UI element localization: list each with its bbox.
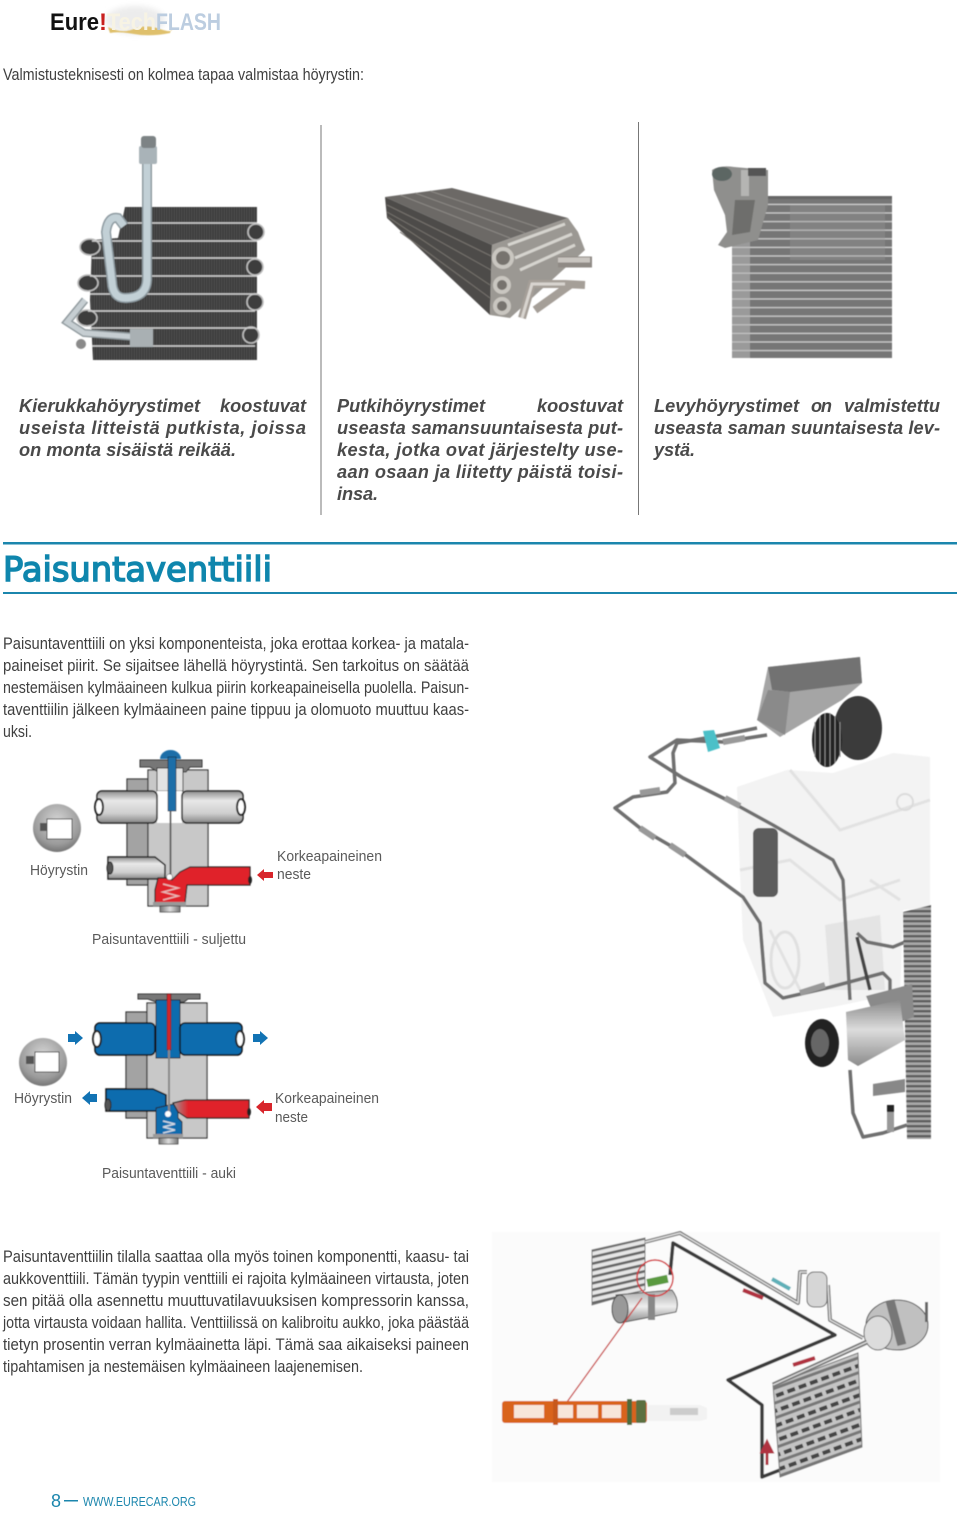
- label: Korkeapaineinen: [277, 849, 382, 865]
- paragraph: orifice tube: Paisuntaventtiilin tilalla saattaa olla myös toinen komponentti, kaasu- tai: [3, 1247, 469, 1266]
- label: Paisuntaventtiili - auki: [102, 1166, 236, 1182]
- paragraph: orifice tube: tietyn prosentin verran kylmäainetta läpi. Tämä saa aikaiseksi paineen: [3, 1335, 469, 1354]
- flow arrow: [772, 1279, 790, 1289]
- image: plate evaporator: [712, 166, 892, 358]
- cyan clip: [703, 730, 720, 752]
- gray low pressure pipe: [645, 1233, 863, 1338]
- logo: EureTech Flash: Tech: [107, 9, 156, 36]
- caption column 2: kesta, jotka ovat järjestelty use-: [337, 440, 623, 460]
- paragraph: orifice tube: aukkoventtiili. Tämän tyypin venttiili ei rajoita kylmäaineen virtausta, joten: [3, 1269, 469, 1288]
- caption column 3: valmistettu: [844, 396, 940, 416]
- label: Korkeapaineinen: [275, 1091, 379, 1107]
- diagram: valve open: [14, 994, 379, 1182]
- caption column 1: useista litteistä putkista, joissa: [19, 418, 306, 438]
- caption column 3: useasta saman suuntaisesta lev-: [654, 418, 940, 438]
- caption column 3: ystä.: [653, 440, 695, 460]
- paragraph: expansion valve: taventtiilin jälkeen kylmäaineen paine tippuu ja olomuoto muuttuu kaas-: [3, 700, 469, 719]
- icon: evaporator disc: [33, 804, 81, 852]
- blower cylinder: [612, 1290, 677, 1323]
- logo: EureTech Flash: !: [99, 9, 107, 36]
- engine ghost: [737, 753, 930, 1017]
- caption column 3: Levyhöyrystimet: [654, 396, 800, 416]
- red leader line: [567, 1298, 642, 1402]
- image: engine and AC circuit: [615, 657, 931, 1139]
- caption column 3: [653, 396, 940, 460]
- label: Höyrystin: [30, 863, 88, 879]
- label: neste: [277, 867, 311, 883]
- paragraph: expansion valve: paineiset piirit. Se sijaitsee lähellä höyrystintä. Sen tarkoitus on säätää: [3, 656, 469, 675]
- caption column 2: [337, 396, 624, 504]
- logo: EureTech Flash: [50, 6, 221, 36]
- receiver: [807, 1272, 827, 1307]
- label: Paisuntaventtiili - suljettu: [92, 932, 246, 948]
- icon: blue arrow left: [82, 1091, 97, 1105]
- diagram: valve closed: [30, 750, 382, 948]
- divider right: [638, 122, 640, 515]
- orifice tube: [502, 1399, 707, 1425]
- label: Höyrystin: [14, 1091, 72, 1107]
- dark liquid pipe: [670, 1243, 835, 1477]
- compressor: [805, 984, 914, 1132]
- icon: red arrow: [256, 1100, 272, 1114]
- website: WWW.EURECAR.ORG: [83, 1495, 196, 1509]
- caption column 2: insa.: [337, 484, 378, 504]
- image: coil evaporator: [67, 136, 264, 360]
- caption column 2: koostuvat: [537, 396, 624, 416]
- flow arrow: [743, 1290, 763, 1298]
- icon: blue arrow in: [68, 1031, 83, 1045]
- caption column 1: [19, 396, 307, 460]
- diagram: AC circuit with orifice tube: [492, 1232, 940, 1482]
- compressor: [864, 1299, 928, 1350]
- paragraph: orifice tube: sen pitää olla asennettu muuttuvatilavuuksisen kompressorin kanssa,: [3, 1291, 469, 1310]
- receiver drier: [753, 828, 778, 897]
- icon: evaporator disc: [19, 1038, 67, 1086]
- footer: [51, 1491, 196, 1511]
- red zoom circle: [637, 1260, 673, 1296]
- label: neste: [275, 1110, 308, 1126]
- paragraph: orifice tube: tipahtamisen ja nestemäisen kylmäaineen laajenemisen.: [3, 1357, 363, 1376]
- caption column 1: on monta sisäistä reikää.: [19, 440, 236, 460]
- paragraph: orifice tube: [2, 1247, 469, 1376]
- icon: red arrow: [257, 869, 273, 881]
- paragraph: expansion valve: nestemäisen kylmäaineen kulkua piirin korkeapaineisella puolella. Paisun-: [3, 678, 469, 697]
- caption column 2: aan osaan ja liitetty päistä toisi-: [337, 462, 623, 482]
- caption column 3: on: [811, 396, 832, 416]
- logo: EureTech Flash: Eure: [50, 9, 99, 36]
- condenser: [903, 905, 931, 1139]
- intro sentence: Valmistusteknisesti on kolmea tapaa valmistaa höyrystin:: [3, 65, 364, 84]
- logo: EureTech Flash: FLASH: [156, 9, 221, 36]
- green valve location: [646, 1275, 669, 1287]
- condenser grid: [773, 1353, 862, 1477]
- evaporator housing: [757, 657, 862, 737]
- paragraph: expansion valve: [3, 634, 469, 741]
- divider left: [320, 125, 322, 515]
- page number: 8: [51, 1491, 61, 1511]
- blower: [812, 696, 882, 767]
- caption column 1: Kierukkahöyrystimet: [19, 396, 201, 416]
- caption column 1: koostuvat: [220, 396, 307, 416]
- caption column 2: Putkihöyrystimet: [337, 396, 486, 416]
- paragraph: orifice tube: jotta virtausta voidaan hallita. Venttiilissä on kalibroitu aukko, joka päästää: [2, 1313, 469, 1332]
- paragraph: expansion valve: uksi.: [3, 722, 32, 741]
- icon: blue arrow out: [253, 1031, 268, 1045]
- heading: Paisuntaventtiili: [3, 550, 272, 590]
- image: tube evaporator: [385, 188, 592, 318]
- caption column 2: useasta samansuuntaisesta put-: [337, 418, 623, 438]
- evaporator grid: [592, 1238, 645, 1305]
- paragraph: expansion valve: Paisuntaventtiili on yksi komponenteista, joka erottaa korkea- ja matala-: [3, 634, 469, 653]
- flow arrow: [793, 1358, 815, 1365]
- refrigerant pipes: [615, 728, 907, 1137]
- flow arrow: [762, 1442, 772, 1465]
